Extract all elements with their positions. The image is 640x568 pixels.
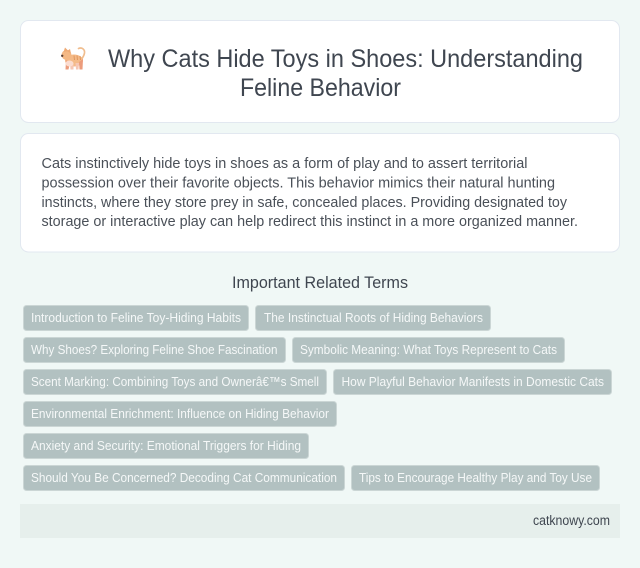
tag: symbolic meaning [292,338,564,362]
tag: anxiety and security: Anxiety and Security: Emotional Triggers for Hiding [31,438,301,453]
tag: scent marking: Scent Marking: Combining Toys and Ownerâ€™s Smell [31,374,319,389]
tag: playful behavior: How Playful Behavior Manifests in Domestic Cats [342,374,604,389]
description text [42,155,578,230]
tag: scent marking [24,370,326,394]
tag: why shoes [24,338,286,362]
tag: environmental enrichment [24,402,336,426]
description text: storage or interactive play can help redirect this instinct in a more organized manner. [42,213,578,230]
tag: instinctual roots: The Instinctual Roots of Hiding Behaviors [264,310,483,325]
tag: should you be concerned [24,466,344,490]
panel: header [20,20,620,122]
title: Feline Behavior [240,74,401,102]
footer [20,504,620,538]
tag: symbolic meaning: Symbolic Meaning: What Toys Represent to Cats [300,342,557,357]
panel: description [20,134,620,252]
description text: possession over their favorite objects. This behavior mimics their natural hunting [42,174,555,192]
tag: tips [352,466,600,490]
tag: environmental enrichment: Environmental Enrichment: Influence on Hiding Behavior [31,406,330,421]
panel: related term tags [24,306,612,490]
description text: Cats instinctively hide toys in shoes as a form of play and to assert territorial [42,155,528,172]
heading: related terms: Important Related Terms [232,274,408,292]
title [108,45,583,102]
tag: why shoes: Why Shoes? Exploring Feline Shoe Fascination [31,342,278,357]
icon: cat [61,48,85,70]
tag: should you be concerned: Should You Be Concerned? Decoding Cat Communication [31,470,337,485]
description card background [20,134,620,252]
tag: introduction [24,306,248,330]
tag: instinctual roots [256,306,490,330]
title: Why Cats Hide Toys in Shoes: Understanding [108,45,583,73]
header card background [20,20,620,122]
footer site name: catknowy.com [533,513,610,528]
tag: playful behavior [334,370,612,394]
tag: tips: Tips to Encourage Healthy Play and Toy Use [359,470,592,485]
tag: anxiety and security [24,434,308,458]
footer bar [20,504,620,538]
tag: introduction: Introduction to Feline Toy-Hiding Habits [31,310,241,325]
description text: instincts, where they store prey in safe, concealed places. Providing designated toy [42,194,567,211]
